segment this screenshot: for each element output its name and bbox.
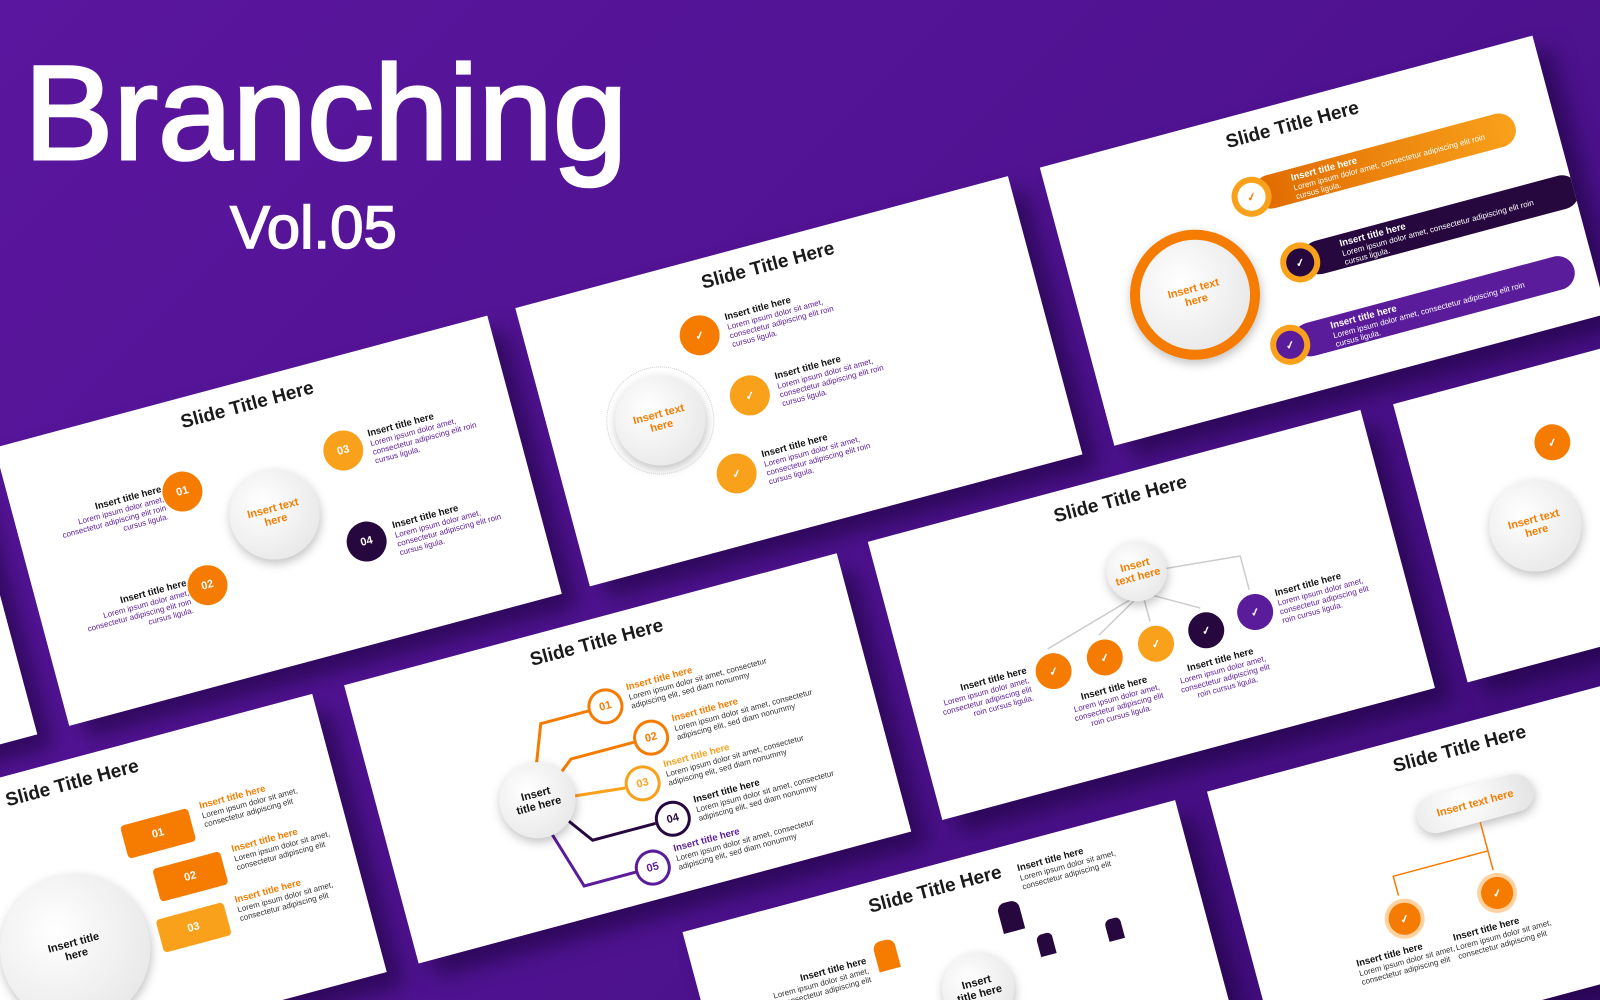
bubble 2 <box>725 371 774 420</box>
text 2: Lorem ipsum dolor sit amet, consectetur adipiscing elit roin cursus ligula. <box>776 357 885 408</box>
circle: Insert <box>961 973 993 992</box>
node text 2: Lorem ipsum dolor sit amet, consectetur adipiscing elit <box>1455 918 1552 961</box>
connector lines <box>1048 555 1250 650</box>
big circle: Insert title <box>47 930 101 956</box>
tab 03: 03 <box>186 920 201 935</box>
node 5: ✓ <box>1249 605 1261 619</box>
tree text 4: Lorem ipsum dolor amet, consectetur adipiscing elit roin cursus ligula. <box>1277 576 1370 625</box>
heading: Slide Title Here <box>866 862 1004 918</box>
person small 2 <box>1104 917 1125 942</box>
circle 03: 03 <box>336 443 351 458</box>
node text 1: Insert title here <box>1355 941 1424 970</box>
bubble 1 <box>675 311 724 360</box>
pill <box>1412 770 1538 837</box>
circle 03 <box>319 426 368 475</box>
node 1 <box>1032 649 1076 693</box>
text 1: Insert title here <box>724 295 792 323</box>
center circle: here <box>263 511 289 529</box>
node text 1: Lorem ipsum dolor sit amet, consectetur adipiscing elit <box>1358 944 1456 987</box>
text 03: Insert title here <box>366 411 435 439</box>
circle 01 <box>158 467 207 516</box>
circle 02: 02 <box>644 730 659 745</box>
node 3: ✓ <box>1150 637 1162 651</box>
tab text 3: Insert title here <box>234 877 302 906</box>
node 3 <box>1134 622 1178 666</box>
heading: Slide Title Here <box>1391 721 1529 777</box>
bubble 1: ✓ <box>694 329 706 343</box>
center circle: title here <box>515 794 563 818</box>
node 3: ✓ <box>1284 338 1296 352</box>
person orange <box>872 938 901 972</box>
text left: Insert title here <box>799 956 868 984</box>
node 2: ✓ <box>1491 886 1503 900</box>
circle 02: 02 <box>200 578 215 593</box>
circle 04 <box>342 517 391 566</box>
slide: hexagon list <box>0 694 387 1000</box>
slide: numbered circuit <box>344 553 911 963</box>
text 01: Lorem ipsum dolor amet, consectetur adipiscing elit roin cursus ligula. <box>61 495 170 540</box>
tab text 1: Insert title here <box>198 783 267 812</box>
text 05: Insert title here <box>672 826 741 854</box>
text 02: Insert title here <box>671 696 739 724</box>
tab text 3: Lorem ipsum dolor sit amet, consectetur adipiscing elit <box>236 880 334 923</box>
bar text 1: Insert title here <box>1290 155 1358 184</box>
text 03: Lorem ipsum dolor amet, consectetur adipiscing elit roin cursus ligula. <box>369 416 477 465</box>
circuit lines <box>535 710 656 888</box>
circle 01: 01 <box>175 484 190 499</box>
heading: Slide Title Here <box>1052 472 1189 527</box>
node text 2: Insert title here <box>1452 915 1521 944</box>
slide: bottom-right pill tree <box>1207 660 1600 1000</box>
center circle <box>491 754 584 847</box>
heading: Slide Title Here <box>699 238 837 294</box>
slide: partial right <box>1393 272 1600 682</box>
text 02: Lorem ipsum dolor amet, consectetur adipiscing elit roin cursus ligula. <box>87 588 195 634</box>
circle 02 <box>629 716 673 760</box>
circle <box>934 944 1022 1000</box>
tab 01: 01 <box>151 826 166 841</box>
tab 01 <box>120 808 196 859</box>
tree text 2: Lorem ipsum dolor amet, consectetur adipiscing elit roin cursus ligula. <box>1073 682 1165 728</box>
orange bubble: ✓ <box>1546 436 1559 450</box>
big circle <box>0 857 167 1000</box>
tree text 2: Insert title here <box>1080 674 1148 703</box>
heading: Slide Title Here <box>3 756 141 811</box>
big ring: Insert text <box>1166 276 1220 302</box>
text 02: Insert title here <box>119 578 188 606</box>
circle 01: 01 <box>598 699 613 714</box>
top circle <box>1100 535 1173 608</box>
text: Insert title here <box>1016 846 1085 874</box>
tab 02: 02 <box>183 869 198 884</box>
circle 03: 03 <box>635 776 650 791</box>
text 04: Lorem ipsum dolor sit amet, consectetur adipiscing elit, sed diam nonummy <box>695 769 835 823</box>
center circle: Insert <box>520 785 552 804</box>
bar 1 <box>1250 110 1520 212</box>
tree text 3: Lorem ipsum dolor amet, consectetur adipiscing elit roin cursus ligula. <box>1179 654 1271 700</box>
node 4 <box>1184 608 1228 652</box>
center circle <box>219 459 330 570</box>
top circle: Insert <box>1119 556 1151 575</box>
node 1: ✓ <box>1246 190 1258 204</box>
circle 05 <box>631 846 675 890</box>
node 2 <box>1473 868 1522 917</box>
text 1: Lorem ipsum dolor sit amet, consectetur adipiscing elit roin cursus ligula. <box>726 297 835 349</box>
node 2 <box>1276 238 1325 287</box>
text 04: Insert title here <box>692 777 761 806</box>
tree text 1: Lorem ipsum dolor amet, consectetur adipiscing elit roin cursus ligula. <box>942 676 1035 718</box>
bubble 2: ✓ <box>744 389 756 403</box>
center circle <box>605 365 715 476</box>
text 04: Lorem ipsum dolor amet, consectetur adipiscing elit roin cursus ligula. <box>394 508 502 557</box>
center circle: here <box>649 417 675 435</box>
tab text 2: Lorem ipsum dolor sit amet, consectetur adipiscing elit <box>233 829 331 872</box>
big circle: here <box>64 946 89 963</box>
node 1: ✓ <box>1048 665 1060 679</box>
text: Lorem ipsum dolor sit amet, consectetur adipiscing elit <box>1019 849 1117 891</box>
text 3: Lorem ipsum dolor sit amet, consectetur adipiscing elit roin cursus ligula. <box>763 435 871 486</box>
text 05: Lorem ipsum dolor sit amet, consectetur adipiscing elit, sed diam nonummy <box>675 818 815 872</box>
node 1 <box>1227 172 1276 221</box>
bar text 1: Lorem ipsum dolor amet, consectetur adipiscing elit roin cursus ligula. <box>1293 132 1486 201</box>
bar text 2: Lorem ipsum dolor amet, consectetur adipiscing elit roin cursus ligula. <box>1341 198 1535 267</box>
center circle: Insert text <box>632 402 686 427</box>
slide: bottom people <box>683 800 1250 1000</box>
big ring: here <box>1184 292 1209 309</box>
heading: Slide Title Here <box>178 377 316 433</box>
center circle: here <box>1524 523 1550 540</box>
heading: Slide Title Here <box>1224 97 1361 153</box>
lines <box>1392 822 1494 896</box>
node 1 <box>1380 894 1429 943</box>
tree text 3: Insert title here <box>1186 646 1255 674</box>
node 3 <box>1266 320 1315 369</box>
node 2: ✓ <box>1099 651 1111 665</box>
node 4: ✓ <box>1200 624 1212 638</box>
bar text 3: Lorem ipsum dolor amet, consectetur adipiscing elit roin cursus ligula. <box>1332 280 1526 349</box>
circle 04: 04 <box>359 534 374 549</box>
bubble 3: ✓ <box>731 467 743 481</box>
text 01: Insert title here <box>94 484 163 512</box>
bar text 2: Insert title here <box>1338 221 1407 249</box>
slide: speech bubbles <box>515 176 1082 586</box>
node 1: ✓ <box>1399 912 1411 926</box>
node 5 <box>1233 590 1277 634</box>
center circle: Insert text <box>246 496 300 521</box>
heading: Slide Title Here <box>528 615 666 671</box>
circle 04 <box>651 797 695 841</box>
text 04: Insert title here <box>391 503 460 531</box>
text 3: Insert title here <box>760 432 829 460</box>
center circle: Insert text <box>1507 507 1561 532</box>
circle 02 <box>183 561 232 610</box>
slide: tree <box>868 410 1435 820</box>
circle 01 <box>583 684 627 728</box>
circle 04: 04 <box>665 811 680 826</box>
subtitle: Vol.05 <box>230 194 397 261</box>
slide: four-circle branching <box>0 316 562 726</box>
center circle <box>1479 469 1592 582</box>
text 02: Lorem ipsum dolor sit amet, consectetur adipiscing elit, sed diam nonummy <box>673 688 813 742</box>
bubble 3 <box>712 449 761 498</box>
tab 02 <box>152 851 229 902</box>
node 2: ✓ <box>1294 256 1306 270</box>
tab text 1: Lorem ipsum dolor sit amet, consectetur adipiscing elit <box>201 786 299 829</box>
bar text 3: Insert title here <box>1329 303 1398 331</box>
tab 03 <box>155 902 232 953</box>
text 03: Insert title here <box>662 742 731 770</box>
circle 03 <box>621 761 665 805</box>
person small 1 <box>1036 932 1057 957</box>
orange bubble <box>1530 420 1574 464</box>
text 2: Insert title here <box>773 354 842 382</box>
text 03: Lorem ipsum dolor sit amet, consectetur adipiscing elit, sed diam nonummy <box>665 733 805 788</box>
tree text 4: Insert title here <box>1274 571 1342 599</box>
text 01: Insert title here <box>625 665 694 693</box>
top circle: text here <box>1114 565 1162 589</box>
person dark <box>996 899 1025 934</box>
slide: bars <box>1040 36 1600 446</box>
node 2 <box>1083 635 1127 680</box>
pill: Insert text here <box>1436 788 1515 820</box>
text 01: Lorem ipsum dolor sit amet, consectetur adipiscing elit, sed diam nonummy <box>628 656 768 711</box>
slide: left sliver row1 <box>0 456 37 866</box>
big ring <box>1115 215 1275 374</box>
bar 3 <box>1290 252 1579 360</box>
title: Branching <box>24 39 627 188</box>
bar 2 <box>1299 171 1583 278</box>
circle 05: 05 <box>645 860 660 875</box>
tab text 2: Insert title here <box>230 827 299 855</box>
tree text 1: Insert title here <box>959 665 1028 694</box>
